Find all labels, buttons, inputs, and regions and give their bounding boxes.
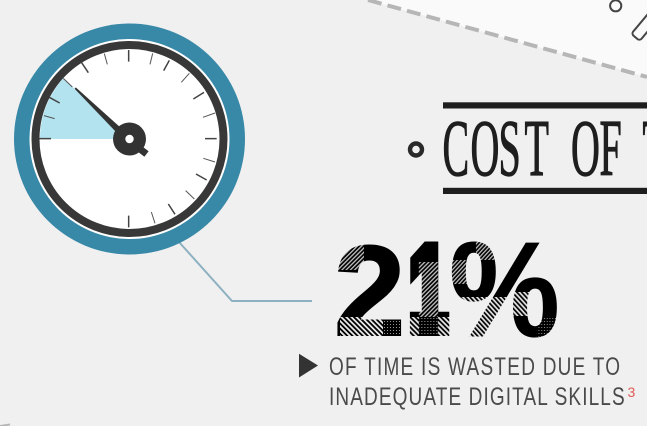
gauge tick marks: [39, 50, 217, 227]
text block: statistic description: OF TIME IS WASTED DUE TO: [329, 352, 620, 381]
leader line from gauge to statistic: [179, 242, 312, 301]
icon: gauge dial: [14, 24, 245, 254]
statistic: 21%: [334, 215, 560, 365]
text block: statistic description: INADEQUATE DIGITAL SKILLS: [329, 382, 625, 411]
text block: statistic description: [329, 352, 636, 411]
icon: pointer triangle: [299, 354, 318, 378]
statistic: 21%: %: [449, 215, 560, 365]
footnote reference: 3: [628, 384, 636, 400]
statistic: 21%: 1: [409, 221, 448, 356]
gauge highlighted wedge: [40, 78, 130, 139]
next section edge at bottom left: [0, 424, 10, 426]
gauge needle and hub: [75, 87, 146, 156]
icon: partial wrench glyph at top right: [610, 0, 647, 41]
statistic: 21%: 2: [334, 220, 405, 363]
panel: lighter upper section with dashed border: [368, 0, 647, 77]
